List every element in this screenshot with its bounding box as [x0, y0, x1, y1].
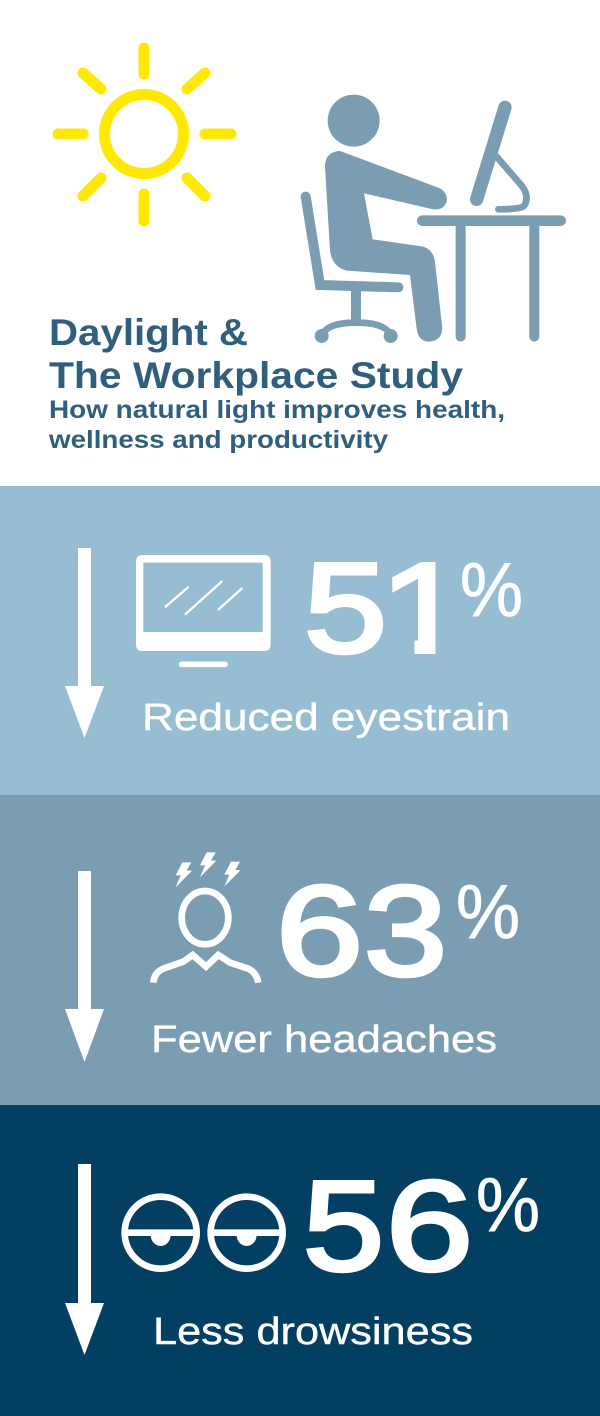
icon: monitor — [136, 555, 271, 664]
stat: 63% — [276, 860, 520, 1003]
stat: 56%: % — [476, 1163, 540, 1248]
panel: fewer headaches — [0, 795, 600, 1105]
panel: less drowsiness — [0, 1105, 600, 1416]
stat: 51%: 5 — [304, 537, 387, 680]
icon: person at desk — [306, 95, 561, 343]
title — [49, 312, 463, 396]
stat: 51%: 1 — [379, 537, 471, 680]
label: less drowsiness: Less drowsiness — [153, 1311, 473, 1353]
stat: 56% — [303, 1155, 540, 1298]
arrow: down — [65, 871, 104, 1062]
arrow: down — [65, 1164, 104, 1355]
stat: 63%: 3 — [364, 860, 447, 1003]
title: Daylight & — [49, 312, 248, 353]
icon: sun — [58, 48, 231, 221]
subtitle — [48, 396, 505, 454]
arrow: down — [65, 548, 104, 738]
icon: headache — [153, 852, 258, 983]
stat: 51% — [307, 562, 521, 656]
panel: reduced eyestrain — [0, 486, 600, 795]
stat: 63%: % — [456, 870, 520, 955]
icon: sleepy eyes — [125, 1197, 283, 1269]
label: reduced eyestrain: Reduced eyestrain — [142, 697, 510, 739]
stat: 63%: 6 — [276, 860, 363, 1003]
panel: header — [0, 0, 600, 486]
subtitle: wellness and productivity — [48, 426, 388, 454]
stat: 56%: 6 — [386, 1155, 473, 1298]
subtitle: How natural light improves health, — [49, 396, 505, 424]
stat: 56%: 5 — [303, 1155, 384, 1298]
title: The Workplace Study — [49, 355, 463, 396]
stat: 51%: % — [460, 548, 523, 633]
label: fewer headaches: Fewer headaches — [151, 1019, 497, 1061]
